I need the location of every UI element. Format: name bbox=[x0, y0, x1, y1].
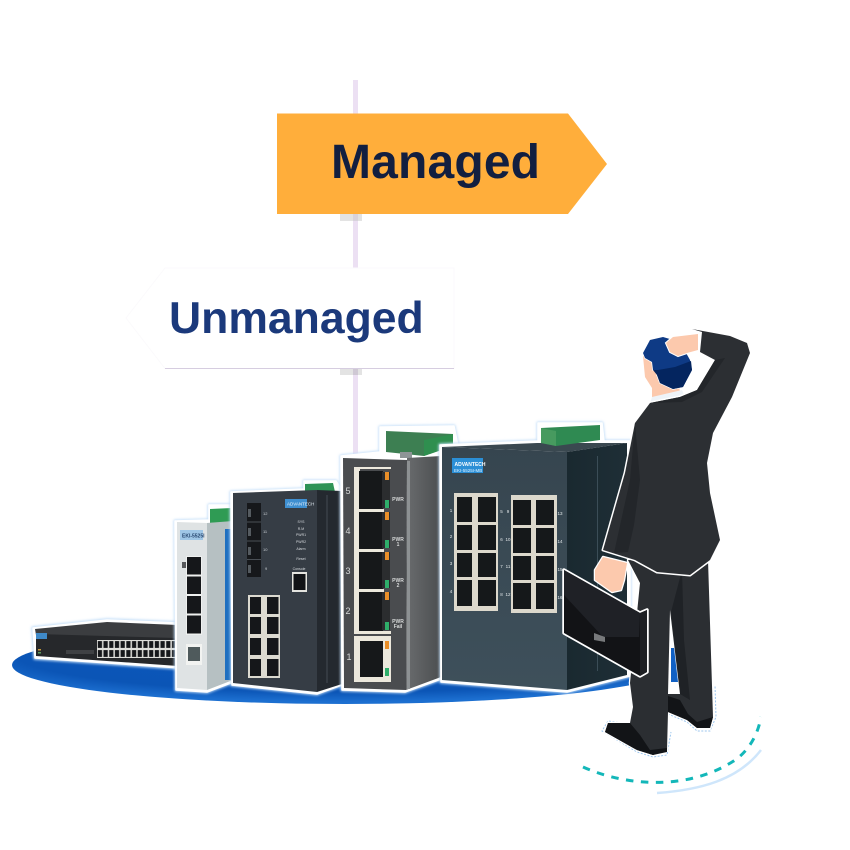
PWR labels: 1 bbox=[397, 542, 400, 548]
status LED labels bbox=[293, 520, 306, 571]
port numbers: 4 bbox=[450, 589, 453, 594]
green terminal block bbox=[210, 508, 232, 523]
port numbers: 8 bbox=[500, 592, 503, 597]
top face bbox=[442, 443, 627, 452]
white switch RJ45 ports bbox=[182, 556, 202, 635]
port numbers: 3 bbox=[450, 561, 453, 566]
port numbers: 11 bbox=[506, 564, 511, 569]
switch: white DIN-rail 5-port bbox=[175, 505, 236, 692]
green terminal block bbox=[305, 483, 335, 492]
SFP labels: 10 bbox=[263, 547, 268, 552]
logo plate bbox=[452, 458, 486, 473]
port numbers: 5 bbox=[500, 509, 503, 514]
status LED labels: PWR2 bbox=[296, 540, 306, 544]
briefcase bbox=[564, 570, 647, 676]
SFP slots bbox=[247, 503, 261, 577]
sign: Unmanaged: Unmanaged bbox=[169, 294, 424, 343]
port numbers: 2 bbox=[345, 606, 351, 616]
logo plate: ADVANTECH bbox=[454, 462, 486, 468]
PWR labels: 2 bbox=[397, 583, 400, 589]
port numbers: 2 bbox=[450, 534, 453, 539]
RJ45 block bbox=[248, 595, 280, 678]
port numbers: 6 bbox=[500, 537, 503, 542]
port numbers: 16 bbox=[557, 595, 563, 600]
SFP labels bbox=[263, 511, 268, 571]
port numbers bbox=[450, 508, 563, 600]
neck and face bbox=[643, 356, 680, 399]
port numbers: 10 bbox=[505, 537, 511, 542]
blue floor ellipse bbox=[12, 626, 678, 704]
port numbers: 7 bbox=[500, 564, 503, 569]
signpost pole bbox=[340, 80, 362, 456]
status LED labels: SYS bbox=[297, 520, 305, 524]
green terminal block bbox=[541, 425, 600, 446]
jacket shading bbox=[614, 358, 725, 553]
left hand bbox=[595, 557, 627, 592]
status LED labels: Alarm bbox=[296, 547, 306, 551]
trouser fold shading bbox=[671, 570, 690, 700]
sign: Managed bbox=[277, 114, 607, 214]
port numbers: 4 bbox=[345, 526, 351, 536]
trousers bbox=[605, 560, 713, 755]
right port block bbox=[511, 495, 557, 613]
switch: dark 12-port with SFP bbox=[231, 481, 342, 694]
port column bbox=[354, 467, 391, 682]
SFP labels: 12 bbox=[263, 511, 268, 516]
port numbers: 12 bbox=[505, 592, 511, 597]
PWR labels: PWR bbox=[392, 619, 404, 625]
white switch SFP port bbox=[186, 644, 202, 665]
port numbers: 14 bbox=[557, 539, 563, 544]
person thinking with briefcase bbox=[564, 329, 750, 757]
light blue arc bbox=[657, 750, 761, 793]
logo plate: EKI-5525I-MB bbox=[454, 468, 482, 473]
sign: Managed: Managed bbox=[331, 136, 540, 189]
status LED labels: Console bbox=[293, 567, 305, 571]
status LED labels: R.M bbox=[298, 527, 304, 531]
port numbers: 1 bbox=[346, 652, 352, 662]
hair bbox=[643, 337, 692, 389]
port numbers: 3 bbox=[345, 566, 351, 576]
status LED labels: Reset bbox=[296, 557, 306, 561]
port numbers: 13 bbox=[557, 511, 563, 516]
left port block bbox=[454, 493, 498, 611]
rack switch logo bbox=[36, 633, 47, 639]
switch: rack-mount 1U bbox=[33, 620, 180, 668]
SFP labels: 9 bbox=[265, 566, 268, 571]
shirt collar bbox=[650, 390, 684, 404]
console port bbox=[292, 572, 307, 592]
port numbers: 1 bbox=[450, 508, 453, 513]
PWR labels bbox=[392, 497, 404, 630]
port numbers: 9 bbox=[507, 509, 510, 514]
jacket bbox=[603, 329, 750, 575]
PWR labels: PWR bbox=[392, 497, 404, 503]
feet dotted outline bbox=[602, 684, 716, 757]
switch: dark 12-port with SFP: ADVANTECH bbox=[287, 502, 314, 506]
dashed teal arc bbox=[583, 717, 761, 782]
raised hand bbox=[666, 334, 698, 356]
SFP labels: 11 bbox=[263, 529, 268, 534]
status LED labels: PWR1 bbox=[296, 533, 306, 537]
PWR labels: PWR bbox=[392, 537, 404, 543]
sign: Unmanaged bbox=[126, 268, 454, 368]
shoes bbox=[605, 696, 713, 755]
port numbers: 5 bbox=[345, 486, 351, 496]
switch: grey 5-port bbox=[341, 426, 458, 692]
PWR labels: PWR bbox=[392, 578, 404, 584]
switch: blue-grey 16-port bbox=[440, 423, 630, 692]
switch: white DIN-rail 5-port: EKI-5525I bbox=[182, 534, 205, 540]
port numbers: 15 bbox=[557, 567, 563, 572]
gap between legs with floor bbox=[668, 610, 680, 694]
green terminal block bbox=[386, 431, 453, 458]
rack switch ports bbox=[97, 640, 177, 658]
port numbers bbox=[345, 486, 352, 662]
PWR labels: Fail bbox=[394, 624, 403, 630]
